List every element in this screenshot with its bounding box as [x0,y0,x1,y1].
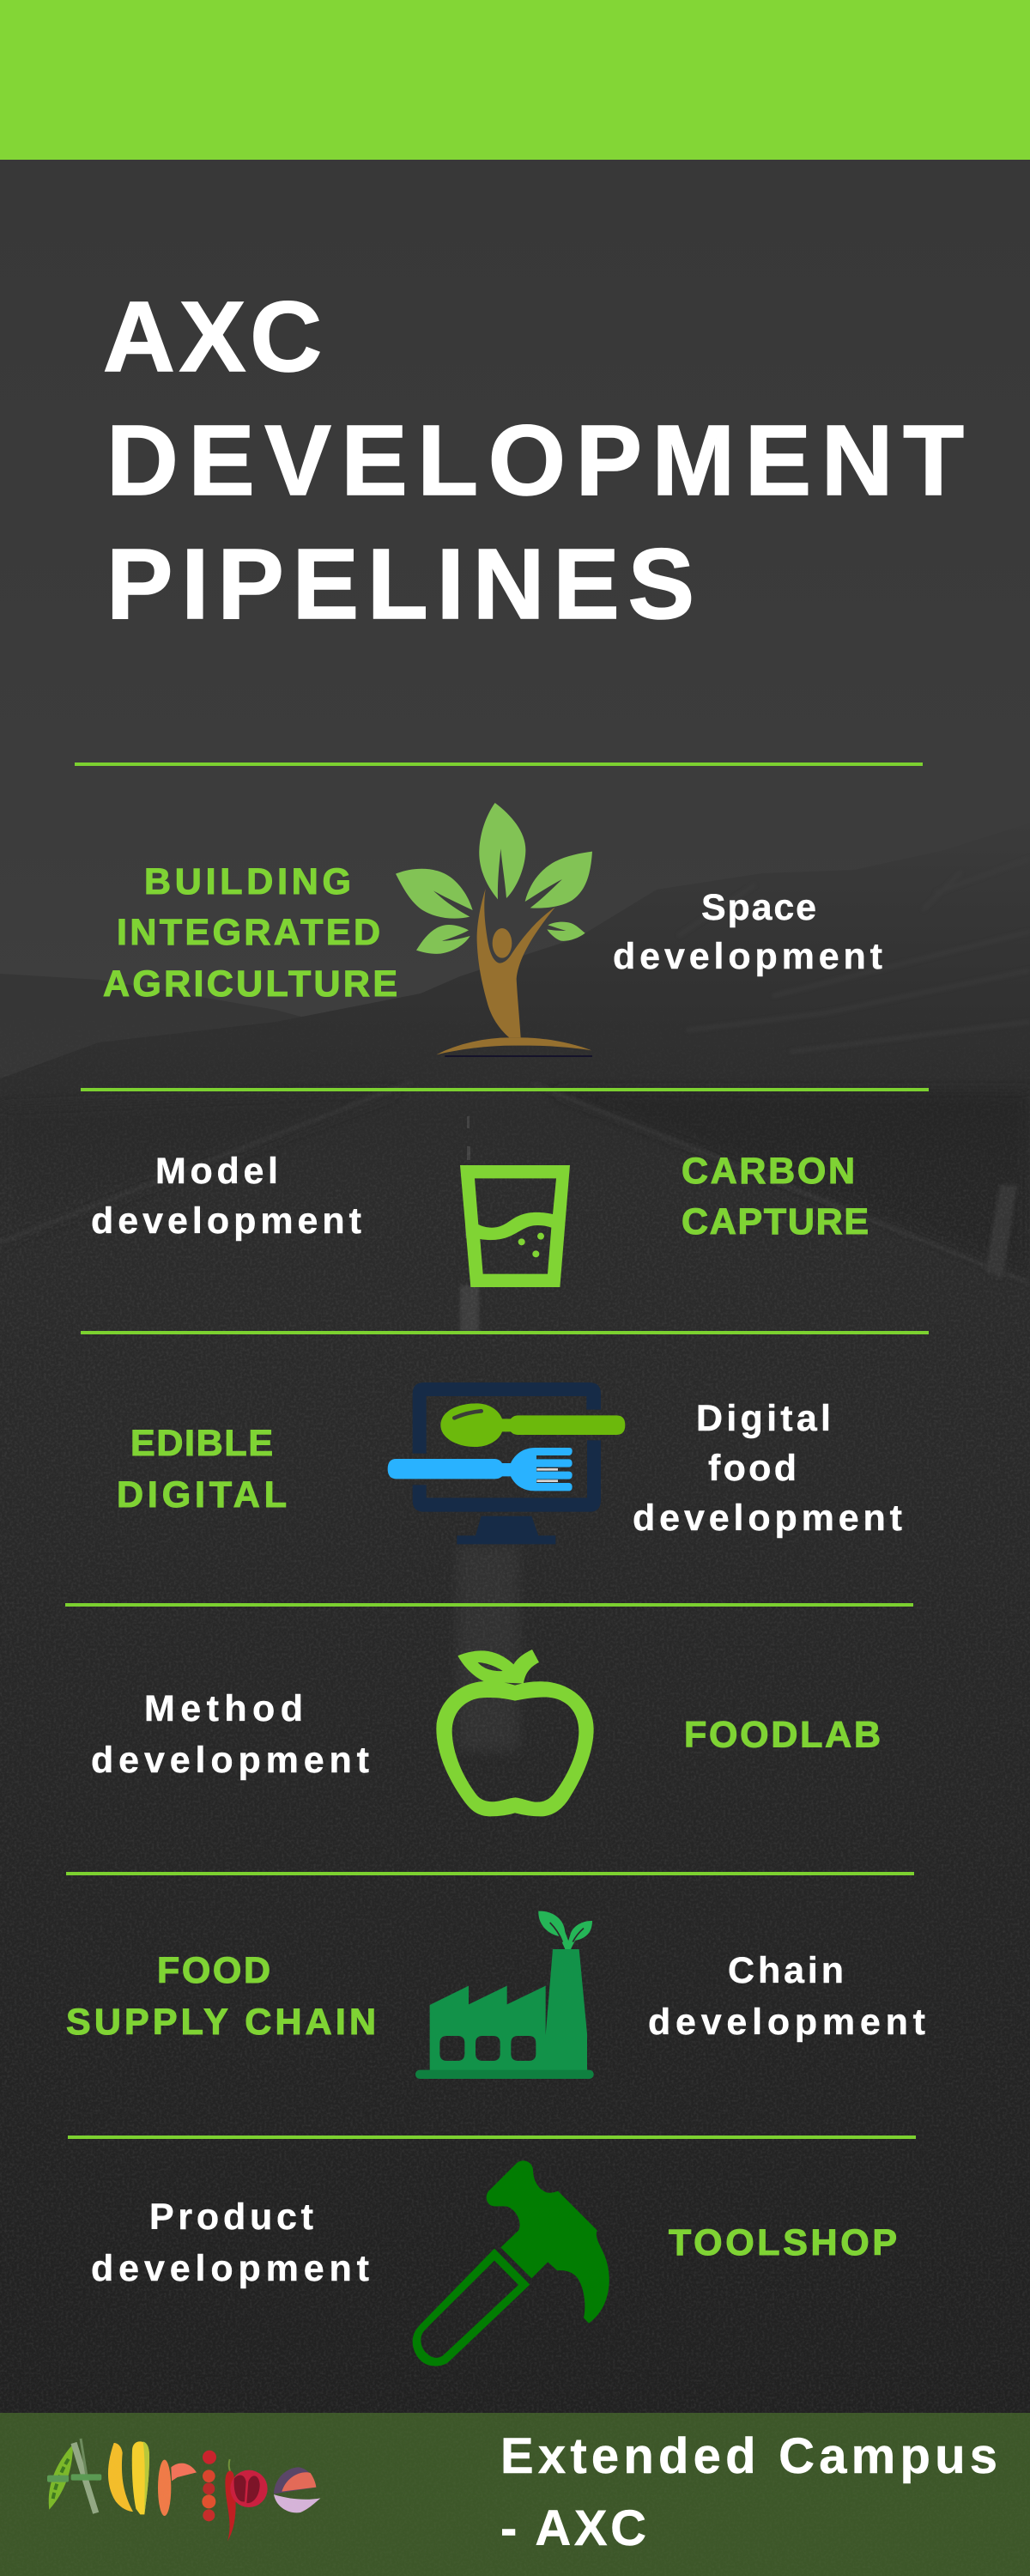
heading: carbon capture: CARBON [682,1151,855,1192]
heading: building integrated agriculture: BUILDING [144,861,351,902]
heading: food supply chain [66,1950,376,2043]
text: method development: Method [144,1688,303,1729]
heading: foodlab: FOODLAB [684,1714,881,1755]
footer band [0,2413,1030,2576]
panel: carbon capture [91,1151,869,1287]
icon: factory with sprout [415,1911,594,2079]
heading: carbon capture [682,1151,869,1242]
header band [0,0,1030,160]
panel: building integrated agriculture [103,803,882,1057]
text: method development: development [91,1740,369,1781]
text: space development [613,887,882,977]
text: model development [91,1151,361,1242]
text: chain development [648,1950,925,2043]
heading: edible digital [117,1423,287,1516]
icon: tree person [396,803,592,1057]
heading: building integrated agriculture: INTEGRATED [117,912,380,953]
icon: apple [436,1649,594,1816]
text: space development: Space [701,887,816,928]
text: space development: development [613,936,882,977]
title: AXC [103,281,322,392]
icon: monitor with spoon and fork [388,1382,625,1544]
heading: food supply chain: SUPPLY CHAIN [66,2002,376,2043]
heading: building integrated agriculture: AGRICULTURE [103,963,397,1005]
text: model development: development [91,1200,361,1242]
panel: foodlab [91,1649,881,1816]
title [103,281,964,640]
heading: edible digital: EDIBLE [130,1423,273,1464]
icon: glass of water [460,1165,570,1287]
heading: carbon capture: CAPTURE [682,1201,869,1242]
divider lines [65,762,929,2139]
text: chain development: Chain [728,1950,844,1991]
text: digital food development: development [633,1498,902,1539]
icon: hammer [413,2160,609,2366]
panel: edible digital [117,1382,902,1544]
heading: food supply chain: FOOD [157,1950,270,1991]
footer text: extended campus: - AXC [500,2500,646,2556]
footer text: extended campus: Extended Campus [500,2428,997,2484]
text: product development: Product [149,2196,313,2238]
footer text: extended campus [500,2428,997,2556]
heading: edible digital: DIGITAL [117,1474,287,1516]
panel: toolshop [91,2160,897,2366]
text: method development [91,1688,369,1781]
text: chain development: development [648,2002,925,2043]
heading: toolshop: TOOLSHOP [669,2222,897,2263]
panel: food supply chain [66,1911,925,2079]
text: digital food development: Digital [696,1398,831,1439]
text: product development [91,2196,369,2289]
title: DEVELOPMENT [106,404,964,516]
logo: Allripe made of vegetables [47,2439,320,2541]
text: product development: development [91,2248,369,2289]
text: model development: Model [155,1151,278,1192]
title: PIPELINES [106,528,694,640]
text: digital food development [633,1398,902,1539]
heading: building integrated agriculture [103,861,397,1005]
text: digital food development: food [708,1448,797,1489]
